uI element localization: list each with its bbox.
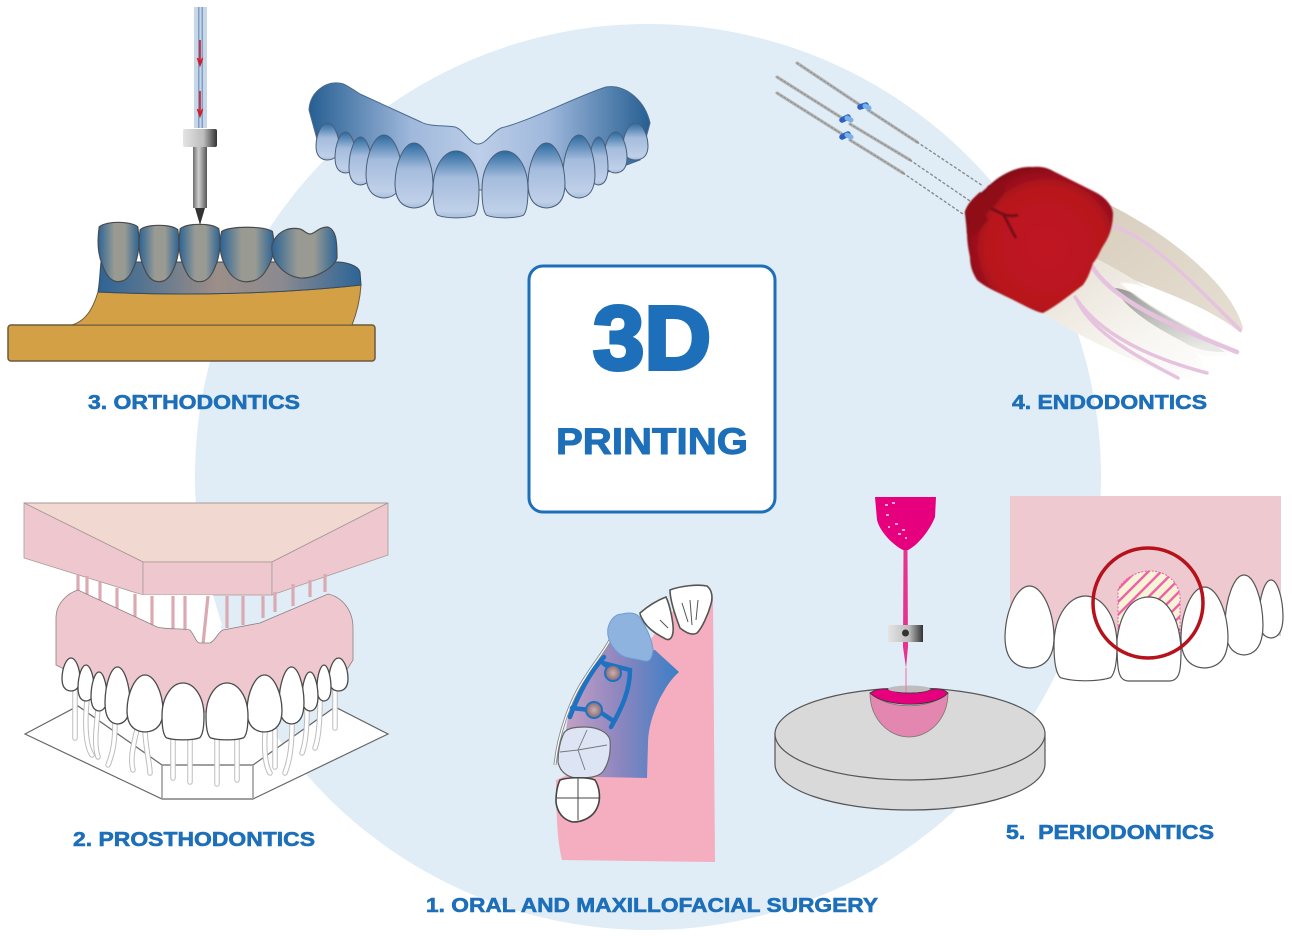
central tooth: [1117, 597, 1181, 681]
cavity opening: [888, 686, 930, 692]
milling tip: [195, 208, 205, 225]
heading: printing: PRINTING: [556, 421, 748, 462]
panel: prosthodontics denture: [24, 503, 388, 799]
blue surgical plate: [570, 657, 630, 727]
panel: oral and maxillofacial surgery: [555, 585, 715, 862]
aligner teeth: [316, 123, 648, 218]
label: oral and maxillofacial surgery: 1. ORAL AND MAXILLOFACIAL SURGERY: [426, 895, 879, 917]
upper front teeth: [640, 585, 712, 640]
panel: periodontics printer: [775, 497, 1045, 810]
milling collar: [183, 129, 217, 147]
heading: 3D: 3D: [593, 289, 711, 389]
endodontic files: [777, 63, 983, 214]
collar hole: [902, 630, 909, 636]
panel: endodontics tooth: [777, 63, 1243, 378]
bone segment: [560, 643, 679, 778]
panel: orthodontics aligner: [309, 83, 650, 218]
ink nozzle: [875, 497, 936, 550]
label: prosthodontics: 2. PROSTHODONTICS: [73, 829, 315, 851]
molar fissures: [560, 730, 607, 770]
tray side left: [24, 503, 143, 595]
ink stream: [903, 550, 908, 668]
milling tube: [194, 7, 207, 128]
tooth root: palatal: [1090, 205, 1243, 333]
label: periodontics: 5. PERIODONTICS: [1006, 822, 1214, 844]
panel: orthodontic model and milling tool: [8, 7, 375, 361]
denture teeth: [62, 658, 348, 740]
thin jet: [905, 668, 907, 692]
furcation highlight: [1120, 283, 1235, 348]
alveolar border: [555, 640, 610, 765]
white molar fissures: [557, 778, 600, 820]
model gum: [98, 262, 361, 294]
base plate: [25, 706, 388, 799]
furcation shadow: [1115, 288, 1225, 352]
teeth row: [1005, 575, 1283, 681]
white gap behind supports: [82, 580, 222, 645]
upper tray: [24, 503, 388, 562]
print supports: [75, 690, 335, 784]
model teeth: [98, 222, 337, 282]
panel: periodontal graft: [1005, 496, 1283, 681]
crown access openings: [965, 181, 1006, 235]
root canals: [1075, 226, 1240, 378]
label: endodontics: 4. ENDODONTICS: [1012, 392, 1207, 414]
printed magenta layer: [870, 689, 948, 704]
base plate: [8, 325, 375, 361]
printer disc top: [775, 688, 1045, 780]
gingiva: [1010, 496, 1281, 636]
fixation screws: [586, 665, 621, 718]
dome cavity: [870, 693, 948, 737]
white molar: [556, 778, 599, 822]
background circle: [195, 24, 1101, 930]
printer collar: [888, 625, 923, 642]
translucent molar: [558, 727, 610, 778]
aligner gum shield: [309, 83, 650, 190]
red flow arrows: [198, 40, 202, 116]
red crown: [965, 167, 1113, 313]
printer disc side: [775, 734, 1045, 810]
denture gum: [56, 590, 353, 712]
model plinth: [72, 285, 361, 325]
red highlight ring: [1093, 548, 1203, 658]
tray side right: [272, 503, 388, 595]
crown fissure: [990, 208, 1018, 238]
hatched graft: [1118, 571, 1180, 640]
translucent canine: [608, 613, 653, 661]
tray front: [143, 562, 272, 595]
panel: 3D printing title box: [529, 266, 775, 512]
tooth root: buccal: [1043, 258, 1237, 378]
palate pink tissue: [556, 590, 715, 862]
milling shaft: [193, 147, 207, 208]
nozzle speckles: [885, 503, 907, 538]
pink supports: [78, 574, 325, 644]
label: orthodontics: 3. ORTHODONTICS: [88, 392, 300, 414]
